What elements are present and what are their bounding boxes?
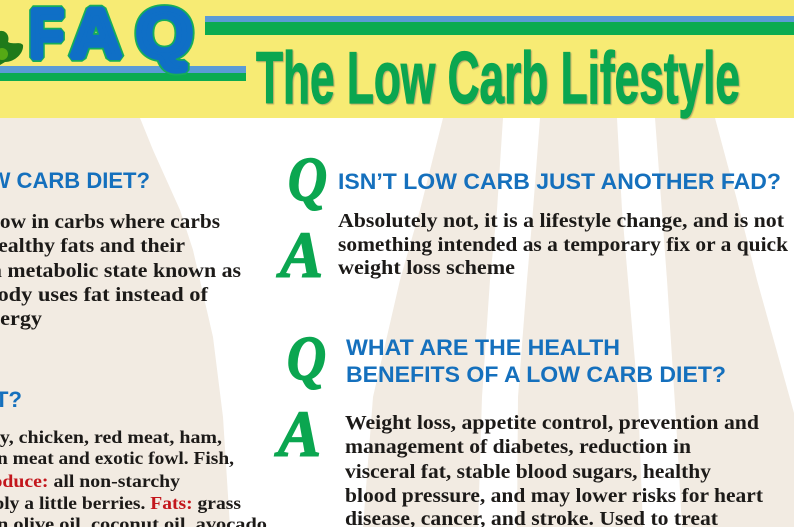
answer: health benefits: Weight loss, appetite control, prevention and <box>345 413 759 434</box>
icon: green leaf <box>0 31 23 65</box>
icon: Q letter 1: Q <box>288 146 327 214</box>
left column: answer 1 <box>0 212 241 330</box>
answer: fad <box>338 211 788 279</box>
header band <box>0 0 794 119</box>
answer: health benefits: visceral fat, stable blood sugars, healthy <box>345 462 711 483</box>
background: beige fork-tine shapes <box>0 118 794 527</box>
icon: Q letter 2: Q <box>287 325 326 393</box>
left column: answer 2: n meat and exotic fowl. Fish, <box>0 448 234 468</box>
answer: fad: something intended as a temporary fix or a quick <box>338 235 788 256</box>
left column: answer 1: low in carbs where carbs <box>0 212 220 233</box>
answer: fad: Absolutely not, it is a lifestyle change, and is not <box>338 211 785 232</box>
top-right rule <box>205 16 794 35</box>
question heading: health benefits: WHAT ARE THE HEALTH <box>346 335 620 360</box>
FAQ heading <box>29 0 193 72</box>
icon: A letter 2: A <box>274 398 321 471</box>
answer: fad: weight loss scheme <box>338 258 515 279</box>
question heading: health benefits <box>346 335 726 387</box>
icon: A letter 1: A <box>276 219 323 292</box>
answer: health benefits: management of diabetes, reduction in <box>345 437 691 458</box>
lower-left rule <box>0 66 246 81</box>
answer: health benefits: blood pressure, and may lower risks for heart <box>345 486 764 507</box>
question heading: fad: ISN’T LOW CARB JUST ANOTHER FAD? <box>338 169 781 194</box>
answer: health benefits <box>345 413 764 527</box>
left column: answer 2 <box>0 427 267 527</box>
question heading: health benefits: BENEFITS OF A LOW CARB DIET? <box>346 362 726 387</box>
